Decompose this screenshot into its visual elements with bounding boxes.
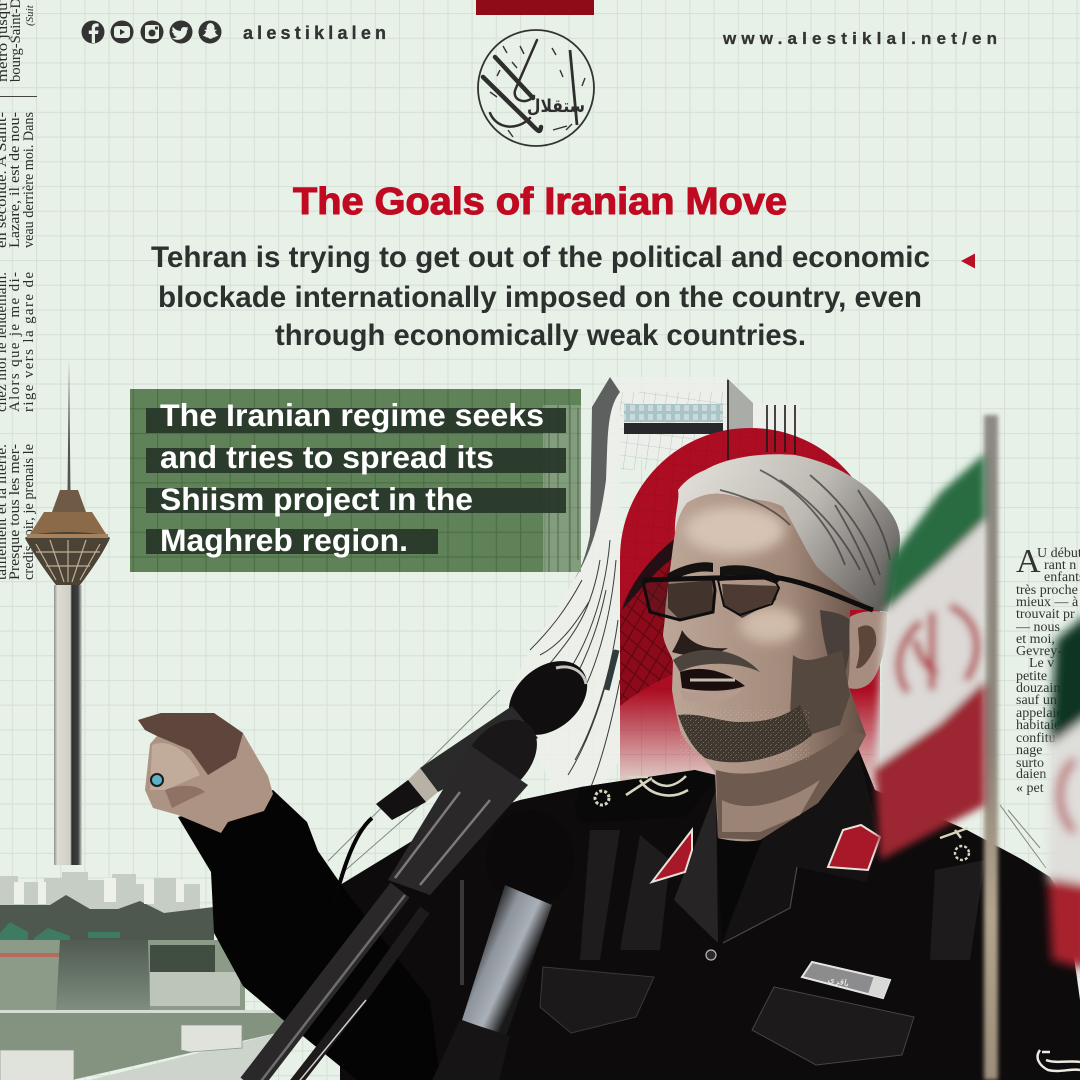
right pocket flap <box>752 987 914 1065</box>
shoulder sheen <box>580 830 670 960</box>
newspaper column right: mieux — à <box>1016 595 1079 610</box>
newspaper column right: surto <box>1016 756 1044 771</box>
newspaper column left: Lazare, il est de nou- <box>7 112 23 248</box>
newspaper column right: — nous <box>1015 620 1060 635</box>
lawn upper <box>0 940 245 1012</box>
newspaper column left <box>0 0 37 580</box>
microphone 2 <box>250 705 552 1080</box>
second blurred flag <box>1048 612 1080 970</box>
red triangle marker <box>961 254 975 268</box>
newspaper column right: « pet <box>1016 781 1044 796</box>
newspaper column right: daien <box>1016 767 1046 782</box>
moustache <box>673 650 760 672</box>
pale overlay of tower <box>543 405 581 572</box>
newspaper column right: très proche <box>1016 583 1078 598</box>
panel text <box>160 397 544 558</box>
icon: youtube <box>110 20 134 44</box>
planters <box>181 1025 242 1052</box>
chin beard <box>678 705 812 762</box>
sleeve <box>178 790 440 1080</box>
lens shadows <box>668 580 778 620</box>
side beard <box>790 650 850 735</box>
tower wing lines over arch <box>728 380 795 460</box>
logo: calligraphic roundel <box>478 30 594 146</box>
newspaper column right: sauf un <box>1016 693 1057 708</box>
dark shirt <box>717 838 762 940</box>
newspaper column right: petite <box>1016 669 1047 684</box>
cheek highlight <box>740 607 800 643</box>
left lapel <box>674 790 718 943</box>
temple hair <box>820 610 855 690</box>
buildings <box>0 872 200 944</box>
icon: twitter <box>170 20 192 44</box>
panel text: Maghreb region. <box>160 522 408 558</box>
panel text: and tries to spread its <box>160 439 494 475</box>
newspaper column right: douzain <box>1016 681 1060 696</box>
hedge <box>56 940 150 1010</box>
microphone 1 <box>376 646 602 820</box>
road <box>70 1030 290 1080</box>
newspaper column right: Le v <box>1029 656 1054 671</box>
man: pointing hand <box>138 713 273 833</box>
Milad tower <box>25 360 110 865</box>
epaulette left <box>574 770 716 823</box>
face and neck <box>663 494 872 841</box>
lower lip <box>680 688 744 703</box>
eyebrows <box>667 562 782 584</box>
hair strands <box>720 470 890 585</box>
newspaper column left: veau derrière moi. Dans <box>21 112 37 248</box>
title: The Goals of Iranian Move <box>293 181 787 223</box>
blurred Iranian flag <box>875 453 985 860</box>
mic stands <box>290 910 425 1080</box>
intro paragraph: through economically weak countries. <box>275 319 806 352</box>
body <box>340 748 1080 1080</box>
Azadi tower <box>328 377 1046 875</box>
red arch <box>607 428 880 785</box>
intro paragraph: blockade internationally imposed on the country, even <box>158 281 922 314</box>
newspaper column right: habitaie <box>1016 718 1060 733</box>
newspaper column left: rige vers la gare de <box>21 272 37 412</box>
green text panel <box>130 389 581 572</box>
panel text: The Iranian regime seeks <box>160 397 544 433</box>
newspaper column right <box>1015 543 1080 796</box>
newspaper column right: et moi, <box>1016 632 1055 647</box>
icon: instagram <box>140 20 164 44</box>
newspaper column left: (Suit <box>24 4 36 26</box>
logo: calligraphic roundel: ستقلال <box>527 96 585 117</box>
collar tab right <box>828 825 880 870</box>
man: uniform body and arm <box>178 748 1080 1080</box>
social handle: alestiklalen <box>243 23 386 43</box>
red top bar <box>476 0 594 15</box>
ear <box>847 611 887 689</box>
green roofs <box>0 922 120 944</box>
forehead highlight <box>685 506 785 554</box>
newspaper column right: nage <box>1016 743 1042 758</box>
microphones <box>250 646 602 1080</box>
lower right leg sketch <box>328 690 1046 875</box>
dark lattice vault <box>620 538 676 706</box>
icon: facebook <box>82 20 104 44</box>
icon: snapchat <box>198 20 222 44</box>
newspaper column right: trouvait pr <box>1016 607 1075 622</box>
newspaper column right: confitu <box>1016 731 1056 746</box>
glasses <box>643 577 873 620</box>
newspaper column left: Presque tous les mer- <box>7 444 23 580</box>
intro paragraph: Tehran is trying to get out of the political and economic <box>151 241 930 274</box>
lawn lower <box>0 1012 290 1080</box>
name tag: باقری <box>827 975 850 989</box>
tower leg and body <box>505 377 800 825</box>
epaulette right <box>940 828 969 860</box>
mouth <box>680 669 745 691</box>
man: neck and head <box>643 454 900 841</box>
newspaper column right: A <box>1016 543 1041 580</box>
microphone 3 foam <box>430 810 574 1080</box>
website address: www.alestiklal.net/en <box>722 29 997 48</box>
nose shadow <box>672 630 728 655</box>
intro paragraph <box>151 241 930 352</box>
bottom right ornament <box>1038 1050 1080 1071</box>
newspaper column left: Alors que je me di- <box>7 272 23 412</box>
newspaper column left: credis soir, je prenais le <box>21 444 37 580</box>
newspaper column right: appelaie <box>1016 706 1063 721</box>
newspaper column right: rant n <box>1044 558 1076 573</box>
button <box>706 950 716 960</box>
ring <box>151 774 163 786</box>
collar tab left <box>652 830 692 882</box>
social icons <box>82 20 222 44</box>
tower edges over panel <box>549 405 578 572</box>
dark outer band <box>574 377 620 580</box>
city and park ground <box>0 872 290 1080</box>
panel text: Shiism project in the <box>160 481 473 517</box>
windows <box>624 404 723 434</box>
neck shadow <box>716 730 866 840</box>
flag pole <box>984 415 998 1080</box>
hair <box>675 454 900 612</box>
name tag <box>802 962 890 998</box>
right collar <box>723 750 881 943</box>
newspaper column right: Gevrey- <box>1016 644 1062 659</box>
dark highlight bars <box>146 408 566 554</box>
flower bed <box>0 953 60 957</box>
right block <box>727 378 753 460</box>
sweeping leg lines <box>530 540 620 800</box>
left pocket flap <box>540 967 654 1033</box>
